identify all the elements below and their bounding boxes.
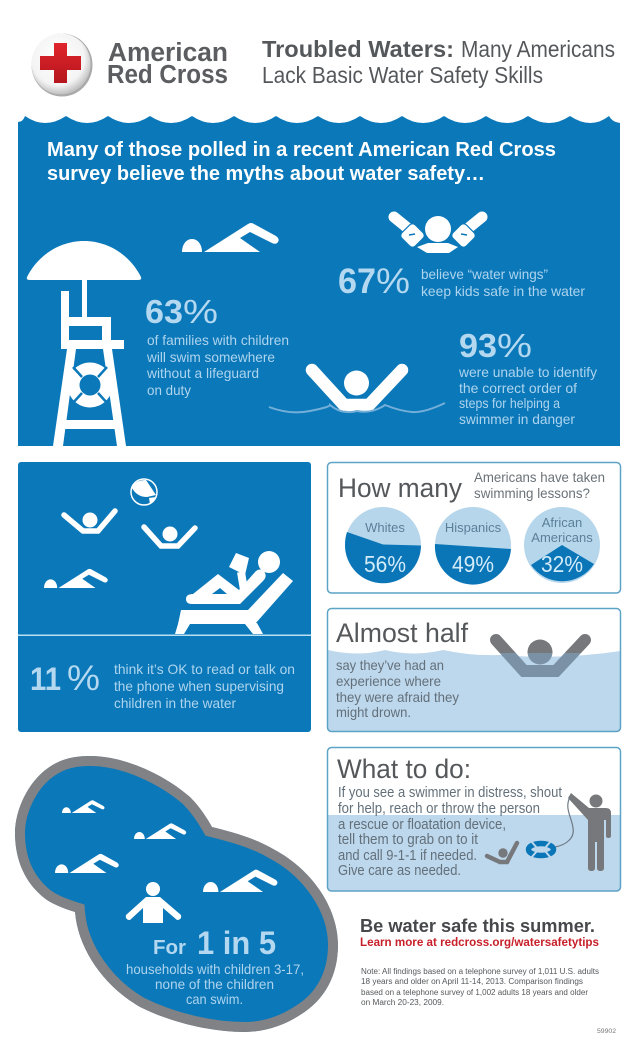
text: afraid they might drown: say they’ve had an bbox=[336, 657, 444, 673]
stat: 93%: were unable to identify bbox=[458, 364, 597, 380]
stat: 11%: think it’s OK to read or talk on bbox=[114, 661, 295, 677]
icon: red cross disc bbox=[32, 34, 92, 96]
document code: 59902 bbox=[597, 1029, 617, 1035]
call to action: Learn more at redcross.org/watersafetytips bbox=[360, 935, 599, 949]
stat: 93% bbox=[458, 327, 597, 427]
heading: almost half: Almost half bbox=[336, 618, 469, 648]
text: instructions: for help, reach or throw the person bbox=[338, 801, 540, 817]
text: afraid they might drown bbox=[336, 657, 459, 720]
icon: person struggling in water bbox=[496, 640, 585, 671]
pie chart: African Americans 32% bbox=[524, 507, 600, 583]
icon: swimmer in danger bbox=[269, 370, 445, 412]
title: Lack Basic Water Safety Skills bbox=[262, 62, 543, 88]
text: instructions: a rescue or floatation device, bbox=[338, 817, 506, 833]
pie chart: Hispanics 49% bbox=[435, 507, 511, 585]
icon: child waving right bbox=[144, 526, 195, 546]
pie chart: Whites 56% bbox=[345, 507, 421, 583]
text: instructions: Give care as needed. bbox=[338, 863, 461, 879]
icon: adult reading on lounger bbox=[175, 551, 293, 634]
heading: what to do: What to do: bbox=[337, 754, 471, 784]
title: Troubled Waters: bbox=[262, 36, 454, 62]
stat: 1 in 5: 1 in 5 bbox=[197, 925, 276, 961]
stat: 11%: % bbox=[67, 659, 100, 698]
footnote bbox=[361, 967, 599, 1007]
text: afraid they might drown: they were afraid they bbox=[336, 689, 459, 705]
icon: rescuer throwing rope bbox=[555, 793, 611, 871]
stat: 63%: will swim somewhere bbox=[146, 349, 275, 365]
footnote: 18 years and older on April 11-14, 2013. Comparison findings bbox=[361, 977, 583, 986]
footnote: Note: All findings based on a telephone survey of 1,011 U.S. adults bbox=[361, 967, 599, 976]
subheading: Americans have taken bbox=[474, 469, 605, 485]
icon: child waving left bbox=[64, 511, 115, 531]
stat: 63%: without a lifeguard bbox=[146, 365, 259, 381]
icon: swimmer bbox=[182, 223, 279, 252]
pie chart: Hispanics 49%: Hispanics bbox=[445, 520, 502, 535]
panel: almost half bbox=[328, 608, 621, 732]
stat: 11%: the phone when supervising bbox=[114, 678, 284, 694]
stat: 93%: the correct order of bbox=[459, 380, 577, 396]
text: instructions: and call 9-1-1 if needed. bbox=[338, 848, 477, 864]
stat: 63% bbox=[145, 293, 289, 398]
stat: 67%: % bbox=[376, 262, 410, 301]
panel: 1 in 5 households bbox=[15, 756, 338, 1032]
heading: myths intro: Many of those polled in a recent American Red Cross bbox=[47, 139, 556, 161]
stat: 63%: on duty bbox=[147, 382, 191, 398]
icon: swimmer small bbox=[44, 569, 108, 588]
pie chart: African Americans 32%: Americans bbox=[531, 530, 593, 545]
heading: myths intro: survey believe the myths about water safety… bbox=[47, 163, 485, 185]
heading: myths intro bbox=[47, 139, 556, 185]
icon: child standing bbox=[126, 882, 181, 923]
icon: lifeguard tower bbox=[27, 241, 141, 446]
call to action: Be water safe this summer. bbox=[360, 915, 595, 936]
icons: swimmers bbox=[55, 800, 277, 892]
header: American Red Cross logo bbox=[32, 34, 228, 96]
call to action bbox=[360, 915, 599, 949]
pie chart: Whites 56%: Whites bbox=[365, 520, 405, 535]
icon: child in water wings bbox=[394, 216, 482, 253]
subheading bbox=[474, 469, 605, 501]
text: afraid they might drown: might drown. bbox=[336, 704, 411, 720]
stat: 1 in 5: For bbox=[153, 937, 186, 959]
stat: 11% bbox=[30, 659, 295, 711]
text: instructions: tell them to grab on to it bbox=[338, 832, 478, 848]
stat: 1 in 5: can swim. bbox=[186, 991, 243, 1007]
stat: 93%: swimmer in danger bbox=[459, 411, 575, 427]
stat: 93%: 93 bbox=[459, 327, 497, 364]
panel: what to do bbox=[328, 748, 621, 891]
stat: 1 in 5: households with children 3-17, bbox=[126, 961, 304, 977]
title bbox=[262, 36, 615, 88]
title: Many Americans bbox=[461, 36, 615, 62]
stat: 93%: steps for helping a bbox=[459, 395, 560, 411]
stat: 67%: keep kids safe in the water bbox=[421, 283, 585, 299]
stat: 11%: 11 bbox=[30, 661, 61, 697]
footnote: on March 20-23, 2009. bbox=[361, 998, 444, 1007]
text: instructions bbox=[338, 785, 562, 879]
stat: 63%: 63 bbox=[145, 293, 183, 330]
pie chart: Whites 56%: 56% bbox=[364, 551, 406, 577]
logo wordmark: American bbox=[108, 39, 228, 67]
logo wordmark: Red Cross bbox=[107, 61, 228, 89]
pie chart: African Americans 32%: African bbox=[542, 515, 582, 530]
stat: 1 in 5 bbox=[126, 925, 304, 1007]
subheading: swimming lessons? bbox=[474, 485, 590, 501]
stat: 1 in 5: none of the children bbox=[155, 976, 274, 992]
icon: swimmer needing rescue bbox=[487, 843, 517, 862]
stat: 93%: % bbox=[497, 327, 532, 364]
panel: supervising children bbox=[18, 462, 311, 732]
panel: how many have taken swimming lessons bbox=[328, 462, 620, 593]
panel: water safety myths bbox=[18, 116, 620, 446]
heading: how many: How many bbox=[338, 473, 463, 503]
pie chart: African Americans 32%: 32% bbox=[541, 551, 583, 577]
stat: 63%: of families with children bbox=[147, 332, 289, 348]
stat: 67%: believe “water wings” bbox=[421, 266, 548, 282]
pie chart: Hispanics 49%: 49% bbox=[452, 551, 494, 577]
stat: 11%: children in the water bbox=[114, 695, 236, 711]
stat: 67%: 67 bbox=[338, 262, 376, 301]
text: afraid they might drown: experience where bbox=[336, 673, 441, 689]
text: instructions: If you see a swimmer in distress, shout bbox=[338, 785, 562, 801]
stat: 63%: % bbox=[183, 293, 218, 330]
icon: blue life ring bbox=[528, 841, 554, 858]
icon: beach ball bbox=[131, 479, 157, 505]
logo wordmark bbox=[107, 39, 228, 89]
footnote: based on a telephone survey of 1,002 adults 18 years and older bbox=[361, 988, 588, 997]
stat: 67% bbox=[338, 262, 585, 301]
